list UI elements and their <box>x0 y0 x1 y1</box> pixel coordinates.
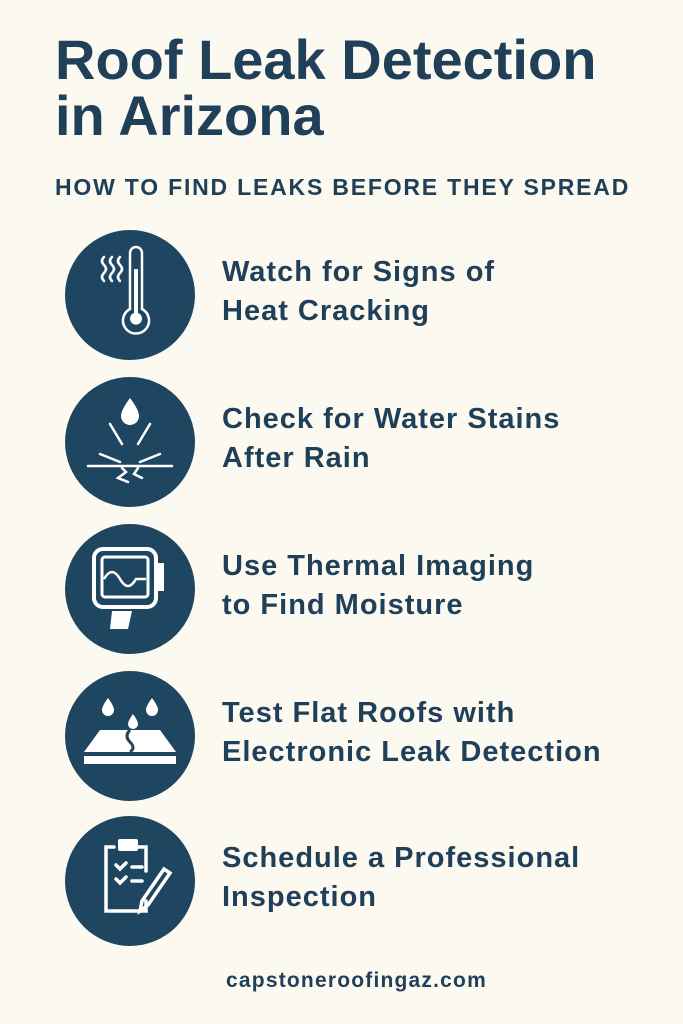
text: Use Thermal Imaging <box>222 550 534 582</box>
icon: thermometer <box>65 230 195 360</box>
text: Watch for Signs of <box>222 256 495 288</box>
icon: thermal camera <box>65 524 195 654</box>
icon: water drop <box>65 377 195 507</box>
text <box>222 256 495 327</box>
subtitle: HOW TO FIND LEAKS BEFORE THEY SPREAD <box>55 174 630 200</box>
text <box>222 403 560 474</box>
item 3: thermal imaging <box>65 524 534 654</box>
text <box>222 697 602 768</box>
title <box>55 28 596 147</box>
text: Electronic Leak Detection <box>222 736 602 768</box>
footer url: capstoneroofingaz.com <box>226 969 487 992</box>
item 5: inspection <box>65 816 580 946</box>
text: Inspection <box>222 881 377 913</box>
text <box>222 842 580 913</box>
title: in Arizona <box>55 84 324 147</box>
item 4: flat roofs <box>65 671 602 801</box>
icon: clipboard <box>65 816 195 946</box>
text <box>222 550 534 621</box>
text: After Rain <box>222 442 371 474</box>
item 1: heat cracking <box>65 230 495 360</box>
item 2: water stains <box>65 377 560 507</box>
text: Test Flat Roofs with <box>222 697 515 729</box>
text: Schedule a Professional <box>222 842 580 874</box>
text: to Find Moisture <box>222 589 464 621</box>
text: Check for Water Stains <box>222 403 560 435</box>
title: Roof Leak Detection <box>55 28 596 91</box>
icon: roof with drops <box>65 671 195 801</box>
text: Heat Cracking <box>222 295 430 327</box>
